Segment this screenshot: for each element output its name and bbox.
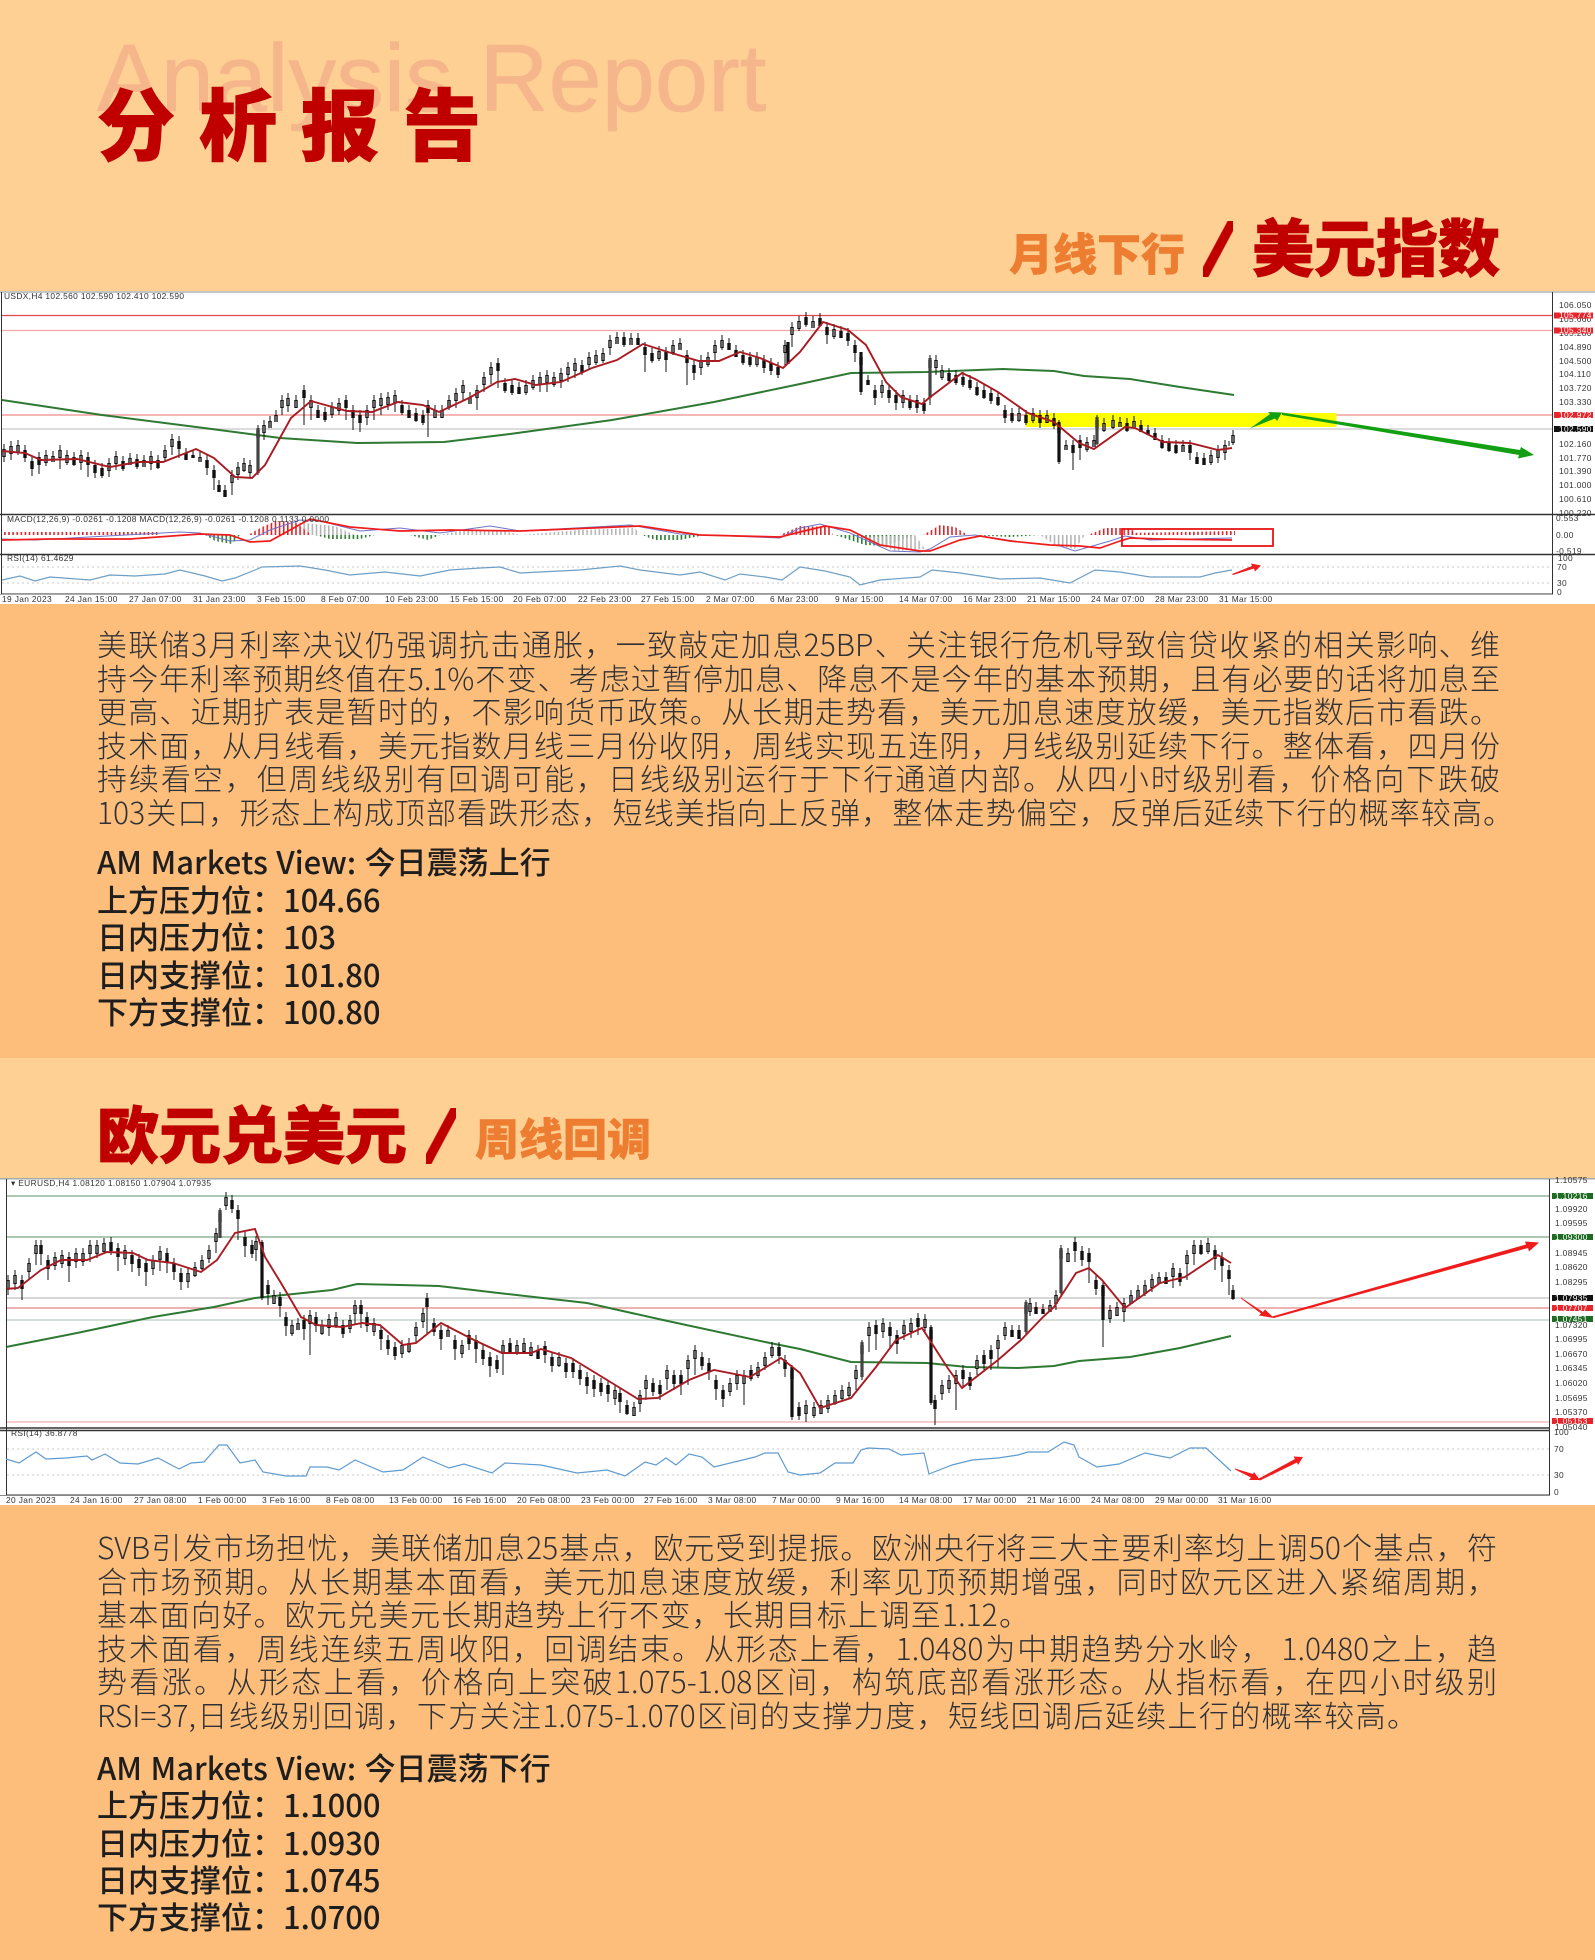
key levels: USD index: 下方支撑位：100.80 <box>97 988 381 1033</box>
date axis labels: 31 Mar 16:00 <box>1218 1495 1272 1505</box>
text block: USD index analysis: 持续看空，但周线级别有回调可能，日线级别运行于下行通道内部。从四小时级别看，价格向下跌破 <box>97 755 1500 799</box>
RSI label: RSI(14) 36.8778 <box>11 1428 78 1438</box>
key levels: USD index: 上方压力位：104.66 <box>97 876 381 920</box>
RSI arrow <box>1232 564 1261 575</box>
date axis labels: 27 Jan 08:00 <box>134 1495 187 1505</box>
short moving average <box>2 322 1232 478</box>
date axis labels: 31 Mar 15:00 <box>1219 594 1273 604</box>
top header band <box>0 0 1595 292</box>
date axis labels: 24 Mar 07:00 <box>1091 594 1145 604</box>
date axis labels: 21 Mar 15:00 <box>1027 594 1081 604</box>
price axis labels: 101.000 <box>1559 480 1592 490</box>
date axis labels: 8 Feb 07:00 <box>321 594 370 604</box>
text block: EURUSD analysis: 合市场预期。从长期基本面看，美元加息速度放缓，利率见顶预期增强，同时欧元区进入紧缩周期， <box>97 1558 1497 1602</box>
date axis labels: 16 Feb 16:00 <box>453 1495 507 1505</box>
price axis labels: 100 <box>1554 1427 1569 1437</box>
date axis labels <box>6 1495 1272 1505</box>
text block: USD index analysis: 103关口，形态上构成顶部看跌形态，短线美指向上反弹，整体走势偏空，反弹后延续下行的概率较高。 <box>97 788 1513 832</box>
price axis labels: 1.07935 <box>1555 1293 1588 1303</box>
price axis labels: 100.220 <box>1559 508 1592 518</box>
text block: EURUSD analysis: 基本面向好。欧元兑美元长期趋势上行不变，长期目标上调至1.12。 <box>97 1591 1029 1635</box>
date axis labels: 9 Mar 15:00 <box>835 594 884 604</box>
RSI panel <box>2 553 1552 585</box>
price axis labels: 30 <box>1557 578 1567 588</box>
date axis labels: 24 Jan 16:00 <box>70 1495 123 1505</box>
price axis labels: 1.10216 <box>1555 1191 1588 1201</box>
chart panel: USDX H4 <box>0 291 1595 604</box>
text block: USD index analysis: 技术面，从月线看，美元指数月线三月份收阴，周线实现五连阴，月线级别延续下行。整体看，四月份 <box>97 722 1500 766</box>
date axis labels: 3 Mar 08:00 <box>708 1495 757 1505</box>
text block: USD index analysis: 更高、近期扩表是暂时的，不影响货币政策。从长期走势看，美元加息速度放缓，美元指数后市看跌。 <box>97 688 1500 732</box>
text block: EURUSD analysis: SVB引发市场担忧，美联储加息25基点，欧元受到提振。欧洲央行将三大主要利率均上调50个基点，符 <box>97 1524 1497 1568</box>
panel dividers and axis <box>0 1179 1550 1496</box>
price axis labels: 1.05040 <box>1555 1422 1588 1432</box>
price axis labels: 1.06345 <box>1555 1363 1588 1373</box>
price axis labels: 1.09595 <box>1555 1218 1588 1228</box>
date axis labels: 24 Mar 08:00 <box>1091 1495 1145 1505</box>
price axis labels: 70 <box>1554 1444 1564 1454</box>
text block: EURUSD analysis: RSI=37,日线级别回调，下方关注1.075-1.070区间的支撑力度，短线回调后延续上行的概率较高。 <box>97 1692 1417 1736</box>
date axis labels: 29 Mar 00:00 <box>1155 1495 1209 1505</box>
red forecast arrows <box>1241 1242 1539 1318</box>
RSI line <box>6 1442 1231 1476</box>
date axis labels <box>2 594 1273 604</box>
subheading: 周线回调: 周线回调 <box>475 1104 651 1168</box>
key levels: USD index: 日内压力位：103 <box>97 913 336 958</box>
chart background <box>0 1178 1595 1505</box>
RSI arrows <box>1235 1456 1303 1480</box>
date axis labels: 24 Jan 15:00 <box>65 594 118 604</box>
date axis labels: 14 Mar 07:00 <box>899 594 953 604</box>
price axis labels: 1.08945 <box>1555 1248 1588 1258</box>
text block: USD index analysis: 美联储3月利率决议仍强调抗击通胀，一致敲定加息25BP、关注银行危机导致信贷收紧的相关影响、维 <box>97 621 1500 665</box>
price axis labels: 1.07320 <box>1555 1320 1588 1330</box>
date axis labels: 7 Mar 00:00 <box>772 1495 821 1505</box>
date axis labels: 27 Jan 07:00 <box>129 594 182 604</box>
date axis labels: 20 Feb 07:00 <box>513 594 567 604</box>
date axis labels: 16 Mar 23:00 <box>963 594 1017 604</box>
price axis labels: 1.05153 <box>1555 1416 1588 1426</box>
date axis labels: 27 Feb 15:00 <box>641 594 695 604</box>
RSI label: RSI(14) 61.4629 <box>7 553 74 563</box>
price axis labels: 100 <box>1558 553 1573 563</box>
price axis labels: 104.890 <box>1559 342 1592 352</box>
price axis labels: 1.09920 <box>1555 1204 1588 1214</box>
text block: EURUSD analysis <box>97 1524 1497 1736</box>
price axis labels: 101.390 <box>1559 466 1592 476</box>
date axis labels: 20 Feb 08:00 <box>517 1495 571 1505</box>
price axis labels: -0.519 <box>1556 546 1582 556</box>
date axis labels: 8 Feb 08:00 <box>326 1495 375 1505</box>
price axis labels: 102.160 <box>1559 439 1592 449</box>
date axis labels: 17 Mar 00:00 <box>963 1495 1017 1505</box>
price axis labels: 30 <box>1554 1470 1564 1480</box>
date axis labels: 3 Feb 15:00 <box>257 594 306 604</box>
date axis labels: 27 Feb 16:00 <box>644 1495 698 1505</box>
price axis labels: 1.08295 <box>1555 1277 1588 1287</box>
chart header: EURUSD: ▾ EURUSD,H4 1.08120 1.08150 1.07904 1.07935 <box>11 1178 211 1188</box>
heading text: 美元指数: 美元指数 <box>1252 199 1500 289</box>
price axis labels: 104.110 <box>1559 369 1591 379</box>
price axis labels: 105.774 <box>1559 310 1592 320</box>
date axis labels: 2 Mar 07:00 <box>706 594 755 604</box>
yellow resistance zone <box>1026 413 1336 427</box>
price axis labels: 100.610 <box>1559 494 1592 504</box>
date axis labels: 20 Jan 2023 <box>6 1495 56 1505</box>
RSI panel <box>6 1428 1549 1480</box>
date axis labels: 31 Jan 23:00 <box>193 594 246 604</box>
price axis labels: 102.972 <box>1559 410 1592 420</box>
date axis labels: 1 Feb 00:00 <box>198 1495 247 1505</box>
date axis labels: 13 Feb 00:00 <box>389 1495 443 1505</box>
chart panel: EURUSD H4 <box>0 1177 1595 1505</box>
price axis labels <box>1552 1175 1593 1497</box>
RSI line <box>2 566 1232 585</box>
short moving average <box>6 1229 1231 1408</box>
MACD histogram <box>4 521 1235 551</box>
date axis labels: 3 Feb 16:00 <box>262 1495 311 1505</box>
price axis labels: 106.050 <box>1559 300 1592 310</box>
date axis labels: 28 Mar 23:00 <box>1155 594 1209 604</box>
key levels: USD index: AM Markets View: 今日震荡上行 <box>97 838 551 883</box>
slash <box>1203 221 1233 277</box>
green forecast arrows <box>1250 412 1534 458</box>
price axis labels: 105.280 <box>1559 328 1592 338</box>
chart header: USDX: USDX,H4 102.560 102.590 102.410 102.590 <box>4 291 184 301</box>
price axis labels: 0 <box>1554 1487 1559 1497</box>
red highlight box <box>1122 529 1273 546</box>
MACD label: MACD(12,26,9) -0.0261 -0.1208 MACD(12,26,9) -0.0261 -0.1208 0.1133 0.0000 <box>7 514 329 524</box>
date axis labels: 19 Jan 2023 <box>2 594 52 604</box>
MACD main line <box>2 520 1232 552</box>
price axis labels: 0 <box>1557 587 1562 597</box>
MACD panel <box>2 514 1273 552</box>
price axis labels <box>1554 300 1593 597</box>
price axis labels: 1.05370 <box>1555 1407 1588 1417</box>
price axis labels: 101.770 <box>1559 453 1592 463</box>
date axis labels: 22 Feb 23:00 <box>578 594 632 604</box>
panel dividers and axis <box>0 292 1595 594</box>
text block: USD index analysis <box>97 621 1513 832</box>
watermark title: Analysis Report: Analysis Report <box>97 25 766 132</box>
slash <box>426 1108 456 1164</box>
price axis labels: 1.06995 <box>1555 1334 1588 1344</box>
price axis labels: 1.07707 <box>1555 1303 1588 1313</box>
price axis labels: 70 <box>1557 562 1567 572</box>
key levels: EURUSD <box>97 1744 551 1938</box>
price axis labels: 105.660 <box>1559 314 1592 324</box>
price axis labels: 1.06670 <box>1555 1349 1588 1359</box>
text block: EURUSD analysis: 技术面看，周线连续五周收阳，回调结束。从形态上看，1.0480为中期趋势分水岭， 1.0480之上，趋 <box>97 1624 1497 1668</box>
price axis labels: 0.553 <box>1556 513 1579 523</box>
resistance and support lines <box>2 316 1553 429</box>
date axis labels: 6 Mar 23:00 <box>770 594 819 604</box>
date axis labels: 9 Mar 16:00 <box>836 1495 885 1505</box>
key levels: EURUSD: 日内支撑位：1.0745 <box>97 1856 381 1901</box>
key levels: USD index: 日内支撑位：101.80 <box>97 950 381 996</box>
price axis labels: 104.500 <box>1559 356 1592 366</box>
candlesticks <box>8 1192 1233 1425</box>
200 period moving average <box>2 369 1234 443</box>
price axis labels: 1.06020 <box>1555 1378 1588 1388</box>
subheading: 月线下行: 月线下行 <box>1009 219 1185 283</box>
heading text: 欧元兑美元: 欧元兑美元 <box>97 1086 407 1176</box>
date axis labels: 14 Mar 08:00 <box>899 1495 953 1505</box>
text block: USD index analysis: 持今年利率预期终值在5.1%不变、考虑过暂停加息、降息不是今年的基本预期，且有必要的话将加息至 <box>97 654 1500 698</box>
key levels: EURUSD: 日内压力位：1.0930 <box>97 1818 381 1864</box>
candlesticks <box>4 312 1233 497</box>
price axis labels: 0.00 <box>1556 530 1574 540</box>
MACD signal line <box>2 519 1232 551</box>
price axis labels: 105.340 <box>1559 325 1592 335</box>
price axis labels: 1.07451 <box>1555 1314 1588 1324</box>
date axis labels: 15 Feb 15:00 <box>450 594 504 604</box>
band behind second heading <box>0 1058 1595 1179</box>
price axis labels: 1.08620 <box>1555 1262 1588 1272</box>
key levels: EURUSD: AM Markets View: 今日震荡下行 <box>97 1744 551 1788</box>
text block: EURUSD analysis: 势看涨。从形态上看，价格向上突破1.075-1.08区间，构筑底部看涨形态。从指标看，在四小时级别 <box>97 1658 1497 1702</box>
price axis labels: 102.590 <box>1559 424 1592 434</box>
price axis labels: 1.05695 <box>1555 1393 1588 1403</box>
chart background <box>0 292 1595 604</box>
heading: 月线下行 / 美元指数 <box>1009 199 1500 289</box>
key levels: USD index <box>97 838 551 1033</box>
date axis labels: 23 Feb 00:00 <box>581 1495 635 1505</box>
date axis labels: 10 Feb 23:00 <box>385 594 439 604</box>
main title: 分析报告: 分析报告 <box>97 65 505 177</box>
key levels: EURUSD: 下方支撑位：1.0700 <box>97 1893 381 1938</box>
key levels: EURUSD: 上方压力位：1.1000 <box>97 1781 381 1826</box>
price axis labels: 1.09300 <box>1555 1232 1588 1242</box>
price axis labels: 103.330 <box>1559 397 1592 407</box>
date axis labels: 21 Mar 16:00 <box>1027 1495 1081 1505</box>
heading: 欧元兑美元 / 周线回调 <box>97 1086 651 1176</box>
price axis labels: 103.720 <box>1559 383 1592 393</box>
200 period moving average <box>6 1284 1231 1368</box>
resistance and support lines <box>7 1196 1549 1422</box>
